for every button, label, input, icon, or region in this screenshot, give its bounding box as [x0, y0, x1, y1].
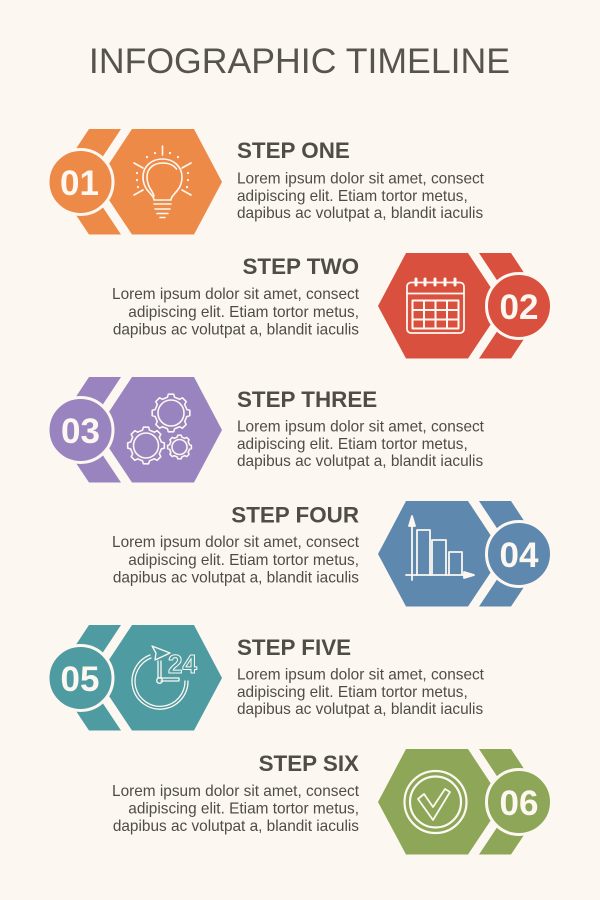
step 6 hexagon	[378, 749, 503, 854]
step 6 body: dapibus ac volutpat a, blandit iaculis	[113, 818, 359, 835]
step 1 hexagon	[97, 129, 222, 234]
step 3 heading: STEP THREE	[237, 387, 377, 412]
step 1 text	[237, 138, 485, 222]
step 2 chevron	[479, 253, 546, 358]
step 5 number badge: 05	[61, 660, 99, 699]
title: INFOGRAPHIC TIMELINE	[89, 41, 510, 81]
step 3 chevron	[54, 377, 121, 482]
step 6 body: adipiscing elit. Etiam tortor metus,	[128, 800, 359, 818]
step 2 text	[112, 254, 360, 338]
icon: gears	[128, 394, 191, 464]
icon: 24 hour clock	[132, 646, 197, 709]
step 2 number badge: 02	[500, 288, 538, 327]
step 3 body: dapibus ac volutpat a, blandit iaculis	[237, 453, 483, 470]
step 2 body: dapibus ac volutpat a, blandit iaculis	[113, 322, 359, 338]
step 4 number badge	[486, 522, 552, 586]
step 3 body: adipiscing elit. Etiam tortor metus,	[237, 436, 468, 453]
step 4 number badge: 04	[500, 536, 539, 575]
step 1 body: Lorem ipsum dolor sit amet, consect	[237, 170, 485, 188]
step 5 chevron	[54, 625, 121, 730]
icon: 24 hour clock: 24	[168, 649, 197, 679]
icon: check mark badge	[404, 771, 466, 833]
step 6 chevron	[479, 749, 546, 854]
step 1 heading: STEP ONE	[237, 138, 350, 163]
step 4 chevron	[479, 501, 546, 606]
step 5 hexagon	[97, 625, 222, 730]
step 4 body: dapibus ac volutpat a, blandit iaculis	[113, 570, 359, 586]
step 6 panel	[112, 749, 552, 854]
step 4 heading: STEP FOUR	[231, 502, 359, 528]
step 5 body: Lorem ipsum dolor sit amet, consect	[237, 666, 485, 684]
step 4 body: Lorem ipsum dolor sit amet, consect	[112, 534, 360, 551]
step 6 number badge: 06	[500, 784, 538, 823]
step 6 body: Lorem ipsum dolor sit amet, consect	[112, 783, 360, 800]
step 3 number badge	[48, 398, 113, 462]
step 6 heading: STEP SIX	[259, 751, 359, 776]
step 1 number badge	[48, 150, 113, 214]
step 1 chevron	[54, 129, 121, 234]
step 1 body: adipiscing elit. Etiam tortor metus,	[237, 188, 468, 205]
step 4 body: adipiscing elit. Etiam tortor metus,	[128, 552, 359, 569]
step 2 number badge	[486, 274, 552, 338]
step 2 body: adipiscing elit. Etiam tortor metus,	[128, 304, 359, 321]
step 3 body: Lorem ipsum dolor sit amet, consect	[237, 418, 485, 436]
step 5 panel	[48, 625, 485, 730]
step 4 panel	[112, 501, 552, 606]
step 3 hexagon	[97, 377, 222, 482]
step 1 panel	[48, 129, 485, 234]
step 5 text	[237, 635, 485, 718]
step 1 number badge: 01	[60, 164, 99, 203]
step 6 text	[112, 751, 360, 835]
step 2 body: Lorem ipsum dolor sit amet, consect	[112, 286, 360, 303]
step 3 text	[237, 387, 485, 470]
step 2 heading: STEP TWO	[242, 254, 359, 279]
step 5 number badge	[48, 646, 113, 710]
step 1 body: dapibus ac volutpat a, blandit iaculis	[237, 205, 483, 222]
step 5 heading: STEP FIVE	[237, 635, 351, 660]
icon: light bulb	[134, 146, 191, 218]
step 2 hexagon	[378, 253, 503, 358]
step 3 number badge: 03	[61, 412, 100, 451]
step 2 panel	[112, 253, 552, 358]
step 5 body: dapibus ac volutpat a, blandit iaculis	[237, 701, 483, 718]
icon: bar chart	[406, 516, 474, 580]
step 6 number badge	[486, 770, 552, 834]
step 4 text	[112, 502, 360, 586]
icon: calendar	[407, 279, 464, 333]
step 4 hexagon	[378, 501, 503, 606]
step 5 body: adipiscing elit. Etiam tortor metus,	[237, 684, 468, 701]
step 3 panel	[48, 377, 485, 482]
